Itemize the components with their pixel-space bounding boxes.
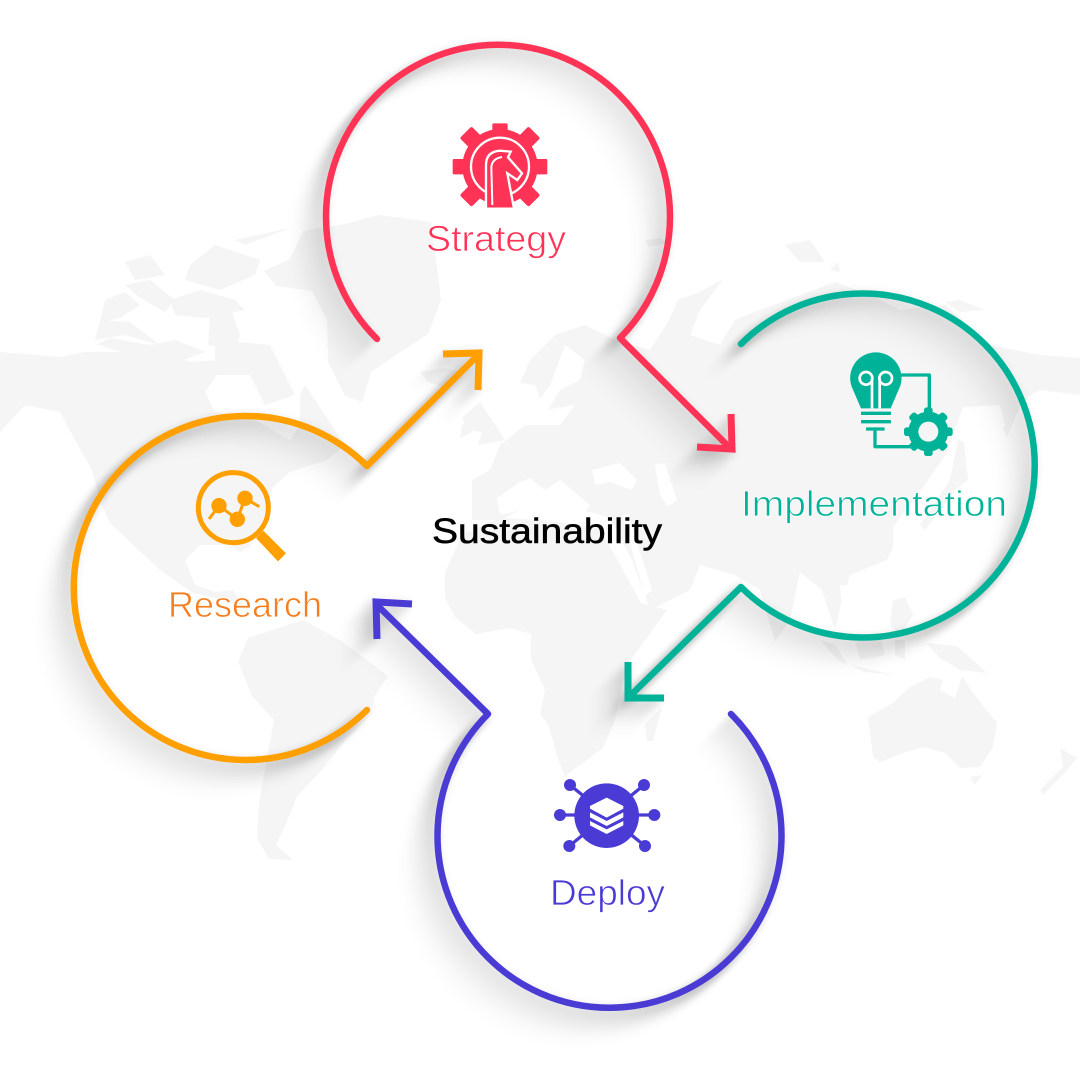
- label: Deploy: Deploy: [550, 872, 665, 913]
- center title: Sustainability: [432, 512, 663, 551]
- ring and arrow: Implementation: [628, 294, 1035, 698]
- world map background: [0, 215, 1080, 860]
- panel: Strategy: [326, 45, 732, 449]
- label: Strategy: Strategy: [426, 218, 566, 259]
- North America: [0, 345, 345, 610]
- Africa: [445, 518, 667, 776]
- icon: light bulb and gear: [850, 352, 953, 456]
- Russian islands: [646, 238, 668, 247]
- Sea of Okhotsk cut and Japan: [925, 405, 1005, 520]
- Greenland: [264, 215, 441, 402]
- Southeast Asia islands: [820, 640, 848, 665]
- icon: gear with chess knight: [453, 123, 547, 209]
- panel: Deploy: [376, 602, 781, 1008]
- Eurasia: [472, 279, 1080, 642]
- label: Research: Research: [168, 584, 322, 625]
- panel: Implementation: [628, 294, 1035, 698]
- Madagascar: [645, 707, 662, 741]
- ring and arrow: Strategy: [326, 45, 732, 449]
- Arctic islands: [100, 292, 140, 322]
- panel: Research: [74, 353, 479, 760]
- ring and arrow: Research: [74, 353, 479, 760]
- Australia: [868, 676, 997, 768]
- icon: magnifier with chart: [198, 473, 286, 561]
- icon: layers network: [554, 779, 660, 852]
- ring and arrow: Deploy: [376, 602, 781, 1008]
- Mediterranean, Black Sea, Caspian and Red Sea cuts: [497, 345, 852, 625]
- South America: [238, 620, 388, 860]
- Iceland and UK: [420, 368, 462, 388]
- label: Implementation: Implementation: [741, 483, 1007, 524]
